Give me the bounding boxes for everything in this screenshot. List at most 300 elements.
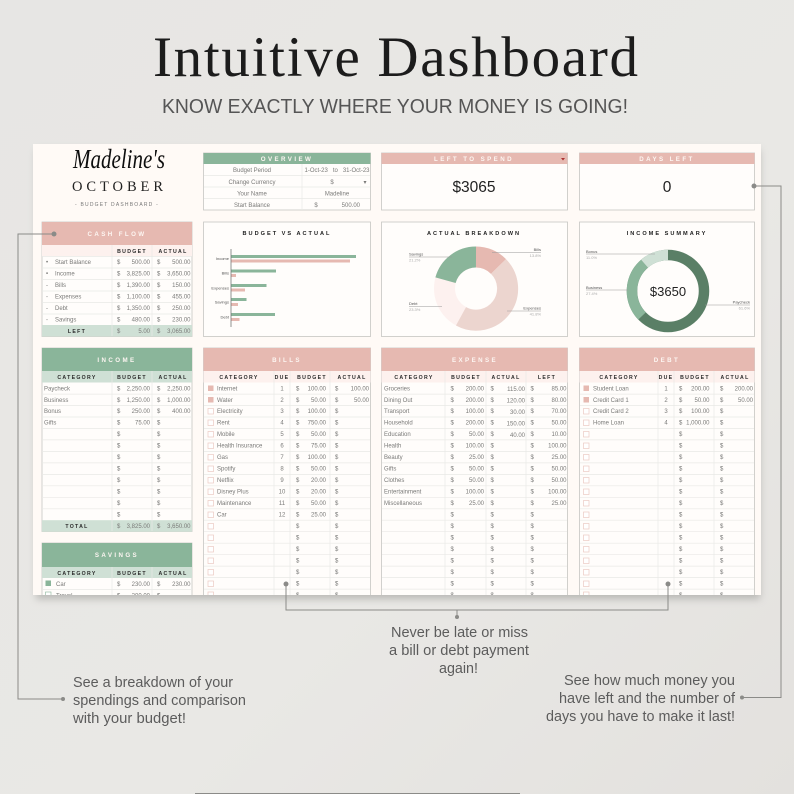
table: debt: $ bbox=[679, 409, 683, 415]
callout: breakdown: See a breakdown of your bbox=[73, 674, 233, 691]
table: debt: $ bbox=[679, 398, 683, 404]
table: expense: $ bbox=[450, 409, 454, 415]
table: expense: 50.00 bbox=[551, 478, 567, 484]
table: bills: 100.00 bbox=[308, 409, 327, 415]
table: expense: $ bbox=[530, 467, 534, 473]
table: debt: $ bbox=[679, 524, 683, 530]
table: bills: $ bbox=[335, 409, 339, 415]
table: bills: 50.00 bbox=[311, 398, 327, 404]
panel: overview: Budget Period bbox=[233, 168, 271, 174]
table: expense: $ bbox=[450, 501, 454, 507]
table: expense: Transport bbox=[384, 409, 410, 415]
table: expense: 10.00 bbox=[551, 432, 567, 438]
table: expense: 25.00 bbox=[469, 501, 485, 507]
table: income: 2,250.00 bbox=[167, 386, 191, 392]
table: income: $ bbox=[117, 444, 121, 450]
callout: payments: a bill or debt payment bbox=[389, 642, 530, 659]
table: expense: $ bbox=[450, 421, 454, 427]
table: expense: 50.00 bbox=[469, 478, 485, 484]
table: debt: Credit Card 2 bbox=[593, 409, 629, 415]
dashboard sheet bbox=[33, 144, 761, 603]
table: savings: $ bbox=[117, 582, 121, 588]
table: savings: $ bbox=[157, 582, 161, 588]
table: expense: $ bbox=[450, 455, 454, 461]
panel: overview: $ bbox=[314, 203, 318, 209]
chart: actual breakdown donut: Bills bbox=[534, 247, 541, 252]
table: bills: 20.00 bbox=[311, 478, 327, 484]
panel: cash flow: $ bbox=[157, 283, 161, 289]
table: bills: 6 bbox=[280, 444, 284, 450]
panel: cash flow: $ bbox=[117, 318, 121, 324]
table: expense: $ bbox=[450, 581, 454, 587]
table: bills: Gas bbox=[217, 455, 228, 461]
callout: days left: See how much money you bbox=[564, 672, 735, 689]
panel: cash flow: 1,100.00 bbox=[127, 294, 151, 300]
table: savings: Car bbox=[56, 582, 66, 588]
table: expense: 50.00 bbox=[469, 467, 485, 473]
table: bills: 1 bbox=[280, 386, 284, 392]
panel: cash flow: 3,065.00 bbox=[167, 329, 191, 335]
table: income: $ bbox=[157, 478, 161, 484]
table: expense: $ bbox=[490, 409, 494, 415]
table: debt: $ bbox=[720, 398, 724, 404]
table: expense: ACTUAL bbox=[491, 375, 521, 381]
table: debt: $ bbox=[720, 490, 724, 496]
table: expense: CATEGORY bbox=[394, 375, 434, 381]
panel: overview: Madeline bbox=[325, 192, 350, 198]
table: income: $ bbox=[157, 467, 161, 473]
chart: actual breakdown donut: 23.3% bbox=[409, 307, 421, 312]
panel: cash flow: $ bbox=[117, 329, 121, 335]
table: expense: $ bbox=[490, 512, 494, 518]
table: expense: Beauty bbox=[384, 455, 403, 461]
callout: payments: Never be late or miss bbox=[391, 624, 528, 641]
panel: cash flow: 250.00 bbox=[172, 306, 191, 312]
panel: cash flow: - bbox=[46, 306, 48, 312]
panel: cash flow: Savings bbox=[55, 318, 76, 324]
table: bills: Netflix bbox=[217, 478, 234, 484]
table: expense: 100.00 bbox=[466, 490, 485, 496]
table: expense: $ bbox=[490, 547, 494, 553]
panel: cash flow: 1,350.00 bbox=[127, 306, 151, 312]
table: debt: Credit Card 1 bbox=[593, 398, 629, 404]
panel: overview: OVERVIEW bbox=[261, 156, 313, 163]
panel: days left: DAYS LEFT bbox=[639, 156, 695, 163]
table: bills: 11 bbox=[279, 501, 286, 507]
table: expense: 120.00 bbox=[507, 398, 526, 404]
table: income: $ bbox=[157, 524, 161, 530]
table: income: $ bbox=[117, 501, 121, 507]
table: bills: $ bbox=[296, 386, 300, 392]
table: debt: 50.00 bbox=[738, 398, 754, 404]
table: bills: $ bbox=[296, 455, 300, 461]
table: expense: $ bbox=[490, 524, 494, 530]
table: bills: Health Insurance bbox=[217, 444, 263, 450]
table: expense: 50.00 bbox=[551, 421, 567, 427]
table: expense: 80.00 bbox=[551, 398, 567, 404]
table: savings: BUDGET bbox=[117, 571, 147, 577]
table: bills: $ bbox=[335, 501, 339, 507]
table: expense: $ bbox=[530, 386, 534, 392]
table: expense: 200.00 bbox=[466, 421, 485, 427]
table: bills: 50.00 bbox=[311, 467, 327, 473]
chart: budget vs actual: BUDGET VS ACTUAL bbox=[243, 231, 331, 237]
table: expense: Household bbox=[384, 421, 413, 427]
table: expense: $ bbox=[450, 444, 454, 450]
table: bills: $ bbox=[335, 512, 339, 518]
table: bills: 7 bbox=[280, 455, 284, 461]
table: debt: DUE bbox=[659, 375, 673, 381]
table: bills: 12 bbox=[279, 512, 286, 518]
table: bills: Maintenance bbox=[217, 501, 252, 507]
panel: overview: Change Currency bbox=[228, 180, 276, 186]
table: debt: $ bbox=[720, 570, 724, 576]
table: income: 1,000.00 bbox=[167, 398, 191, 404]
table: bills: 750.00 bbox=[308, 421, 327, 427]
table: debt: 1 bbox=[664, 386, 668, 392]
panel: cash flow: $ bbox=[117, 306, 121, 312]
table: expense: 25.00 bbox=[469, 455, 485, 461]
table: bills: $ bbox=[335, 524, 339, 530]
table: income: $ bbox=[117, 409, 121, 415]
table: debt: 100.00 bbox=[691, 409, 710, 415]
table: expense: 115.00 bbox=[507, 387, 526, 393]
table: debt: $ bbox=[679, 558, 683, 564]
table: debt: 200.00 bbox=[735, 386, 754, 392]
table: income: 3,825.00 bbox=[127, 524, 151, 530]
table: expense: $ bbox=[450, 593, 454, 599]
table: income: $ bbox=[157, 432, 161, 438]
table: expense: LEFT bbox=[538, 375, 556, 381]
table: income: Gifts bbox=[44, 421, 56, 427]
table: debt: $ bbox=[720, 386, 724, 392]
table: bills: Internet bbox=[217, 386, 238, 392]
table: bills: $ bbox=[296, 467, 300, 473]
table: bills: Mobile bbox=[217, 432, 235, 438]
table: savings: ACTUAL bbox=[158, 571, 188, 577]
panel: cash flow: 5.00 bbox=[138, 329, 151, 335]
table: expense: 100.00 bbox=[466, 444, 485, 450]
chart: actual breakdown donut: 21.2% bbox=[409, 258, 421, 262]
table: bills: DUE bbox=[275, 375, 289, 381]
chart: income summary donut: Business bbox=[586, 285, 602, 290]
table: debt: 3 bbox=[664, 409, 668, 415]
table: income: $ bbox=[117, 421, 121, 427]
table: expense: 100.00 bbox=[466, 409, 485, 415]
table: bills: Car bbox=[217, 512, 227, 518]
table: debt: ACTUAL bbox=[720, 375, 750, 381]
table: expense: $ bbox=[530, 478, 534, 484]
table: expense: $ bbox=[490, 398, 494, 404]
arrow: days left callout connector bbox=[740, 184, 781, 700]
table: bills: Rent bbox=[217, 421, 230, 427]
panel: left to spend: $3065 bbox=[452, 179, 496, 196]
table: expense: $ bbox=[490, 455, 494, 461]
table: debt: $ bbox=[720, 593, 724, 599]
chart: budget vs actual bbox=[204, 222, 370, 336]
table: savings: 230.00 bbox=[172, 582, 191, 588]
table: expense bbox=[382, 348, 568, 603]
panel: cash flow: $ bbox=[157, 272, 161, 278]
table: debt: $ bbox=[720, 512, 724, 518]
table: expense: 30.00 bbox=[510, 410, 526, 416]
table: expense: $ bbox=[490, 421, 494, 427]
table: expense: Entertainment bbox=[384, 490, 422, 496]
table: expense: 70.00 bbox=[551, 409, 567, 415]
table: expense: $ bbox=[530, 409, 534, 415]
table: bills: 4 bbox=[280, 421, 284, 427]
table: debt: $ bbox=[720, 432, 724, 438]
table: income: $ bbox=[157, 444, 161, 450]
table: bills: $ bbox=[296, 490, 300, 496]
table: bills: 50.00 bbox=[354, 398, 370, 404]
table: expense: $ bbox=[450, 570, 454, 576]
panel: cash flow: $ bbox=[117, 272, 121, 278]
callout: breakdown bbox=[72, 674, 246, 727]
table: income: 250.00 bbox=[132, 409, 151, 415]
table: expense: $ bbox=[450, 490, 454, 496]
table: expense: $ bbox=[530, 536, 534, 542]
table: expense: $ bbox=[530, 490, 534, 496]
table: bills: Disney Plus bbox=[217, 490, 249, 496]
table: debt: $ bbox=[679, 478, 683, 484]
table: debt: 4 bbox=[664, 421, 668, 427]
chart: income summary donut: INCOME SUMMARY bbox=[627, 231, 707, 237]
panel: cash flow: ACTUAL bbox=[158, 249, 188, 255]
table: income: $ bbox=[157, 421, 161, 427]
table: bills: BILLS bbox=[272, 357, 302, 364]
chart: actual breakdown donut: Expenses bbox=[523, 306, 541, 310]
table: income: Bonus bbox=[44, 409, 61, 415]
table: bills: 100.00 bbox=[308, 386, 327, 392]
table: debt: CATEGORY bbox=[599, 375, 639, 381]
table: bills: $ bbox=[296, 547, 300, 553]
table: bills: ACTUAL bbox=[337, 375, 367, 381]
table: expense: $ bbox=[530, 455, 534, 461]
panel: cash flow: Expenses bbox=[55, 294, 81, 300]
table: income: 2,250.00 bbox=[127, 386, 151, 392]
table: bills: CATEGORY bbox=[219, 375, 259, 381]
table: expense: $ bbox=[490, 558, 494, 564]
table: bills: $ bbox=[296, 581, 300, 587]
table: debt: $ bbox=[679, 593, 683, 599]
table: bills: 2 bbox=[280, 398, 284, 404]
table: debt: $ bbox=[720, 421, 724, 427]
table: income: $ bbox=[157, 501, 161, 507]
table: income: $ bbox=[117, 467, 121, 473]
table: expense: $ bbox=[450, 478, 454, 484]
table: expense: $ bbox=[530, 581, 534, 587]
table: expense: Clothes bbox=[384, 478, 404, 484]
table: expense: $ bbox=[530, 547, 534, 553]
table: income: BUDGET bbox=[117, 375, 147, 381]
table: bills: 20.00 bbox=[311, 490, 327, 496]
callout: breakdown: spendings and comparison bbox=[73, 692, 246, 709]
table: expense: $ bbox=[490, 501, 494, 507]
table: debt: Student Loan bbox=[593, 386, 629, 392]
table: savings: $ bbox=[117, 594, 121, 600]
table: expense: $ bbox=[490, 467, 494, 473]
table: income: CATEGORY bbox=[57, 375, 97, 381]
panel: cash flow: $ bbox=[117, 294, 121, 300]
panel: cash flow: $ bbox=[157, 294, 161, 300]
table: debt: $ bbox=[720, 455, 724, 461]
table: income: INCOME bbox=[97, 357, 137, 364]
table: expense: $ bbox=[490, 570, 494, 576]
panel: cash flow: - bbox=[46, 283, 48, 289]
table: expense: $ bbox=[490, 490, 494, 496]
table: debt: $ bbox=[720, 547, 724, 553]
table: expense: EXPENSE bbox=[452, 357, 498, 364]
table: expense: 50.00 bbox=[469, 432, 485, 438]
table: income bbox=[42, 348, 192, 532]
callout: days left: have left and the number of bbox=[559, 690, 736, 707]
panel: cash flow: • bbox=[46, 260, 48, 266]
table: debt: $ bbox=[720, 524, 724, 530]
table: bills: $ bbox=[296, 536, 300, 542]
table: debt: $ bbox=[679, 455, 683, 461]
chart: income summary donut: 11.0% bbox=[586, 255, 597, 260]
panel: cash flow: 500.00 bbox=[132, 260, 151, 266]
table: savings: 200.00 bbox=[132, 594, 151, 600]
table: expense: $ bbox=[530, 421, 534, 427]
table: income: Paycheck bbox=[44, 386, 71, 392]
table: income: $ bbox=[117, 398, 121, 404]
table: expense: $ bbox=[530, 524, 534, 530]
panel: cash flow: $ bbox=[157, 260, 161, 266]
table: debt: BUDGET bbox=[680, 375, 710, 381]
table: bills: $ bbox=[296, 478, 300, 484]
table: expense: $ bbox=[490, 386, 494, 392]
table: expense: 200.00 bbox=[466, 386, 485, 392]
table: income: $ bbox=[157, 490, 161, 496]
panel: cash flow: $ bbox=[117, 283, 121, 289]
table: income: $ bbox=[117, 432, 121, 438]
table: bills: Water bbox=[217, 398, 233, 404]
table: bills: 100.00 bbox=[351, 386, 370, 392]
table: income: TOTAL bbox=[65, 524, 89, 530]
chart: budget vs actual: Bills bbox=[222, 270, 229, 276]
chart: budget vs actual: Income bbox=[216, 256, 230, 261]
table: debt: $ bbox=[720, 409, 724, 415]
table: bills: 75.00 bbox=[311, 444, 327, 450]
table: expense: Gifts bbox=[384, 467, 396, 473]
panel: cash flow: 3,825.00 bbox=[127, 272, 151, 278]
table: expense: Health bbox=[384, 444, 401, 450]
table: income: ACTUAL bbox=[158, 375, 188, 381]
table: bills: $ bbox=[335, 593, 339, 599]
panel: overview: 1-Oct-23 to 31-Oct-23 bbox=[304, 168, 370, 174]
table: income: 400.00 bbox=[172, 409, 191, 415]
table: bills: 50.00 bbox=[311, 501, 327, 507]
table: expense: $ bbox=[490, 444, 494, 450]
table: expense: 40.00 bbox=[510, 433, 526, 439]
table: expense: $ bbox=[450, 547, 454, 553]
table: bills: 5 bbox=[280, 432, 284, 438]
panel: cash flow: Bills bbox=[55, 283, 66, 289]
table: debt: 200.00 bbox=[691, 386, 710, 392]
brand heading: Madeline's bbox=[72, 144, 165, 174]
table: income: $ bbox=[117, 512, 121, 518]
table: savings: 230.00 bbox=[132, 582, 151, 588]
panel: cash flow: 230.00 bbox=[172, 318, 191, 324]
panel: cash flow: CASH FLOW bbox=[87, 231, 147, 238]
table: expense: $ bbox=[490, 478, 494, 484]
table: bills: $ bbox=[335, 547, 339, 553]
table: expense: $ bbox=[530, 558, 534, 564]
callout: days left bbox=[546, 672, 736, 725]
table: expense: 85.00 bbox=[551, 386, 567, 392]
table: bills: $ bbox=[335, 467, 339, 473]
table: debt: $ bbox=[679, 467, 683, 473]
table: income: $ bbox=[157, 398, 161, 404]
table: bills: 8 bbox=[280, 467, 284, 473]
table: expense: $ bbox=[450, 432, 454, 438]
table: debt: $ bbox=[679, 444, 683, 450]
table: debt bbox=[580, 348, 754, 603]
table: income: $ bbox=[117, 478, 121, 484]
table: expense: $ bbox=[450, 512, 454, 518]
table: bills: 50.00 bbox=[311, 432, 327, 438]
table: expense: $ bbox=[530, 593, 534, 599]
arrow: bills and debt callout connector bbox=[284, 582, 670, 619]
chart: income summary donut: Paycheck bbox=[733, 300, 750, 304]
chart: budget vs actual: Expenses bbox=[211, 286, 229, 290]
table: bills: $ bbox=[296, 593, 300, 599]
table: bills: $ bbox=[296, 570, 300, 576]
table: bills: $ bbox=[296, 409, 300, 415]
table: bills: $ bbox=[296, 421, 300, 427]
table: expense: 100.00 bbox=[548, 444, 567, 450]
chart: income summary donut: 61.6% bbox=[739, 306, 750, 310]
table: bills: $ bbox=[296, 524, 300, 530]
table: bills: 25.00 bbox=[311, 512, 327, 518]
panel: overview bbox=[204, 153, 370, 210]
table: income: 75.00 bbox=[135, 421, 151, 427]
panel: cash flow: 150.00 bbox=[172, 283, 191, 289]
table: expense: $ bbox=[530, 398, 534, 404]
callout: breakdown: with your budget! bbox=[72, 710, 186, 727]
table: bills: $ bbox=[296, 512, 300, 518]
table: expense: $ bbox=[490, 536, 494, 542]
panel: days left bbox=[580, 153, 754, 210]
panel: left to spend: LEFT TO SPEND bbox=[434, 156, 514, 163]
table: debt: 2 bbox=[664, 398, 668, 404]
table: debt: $ bbox=[679, 581, 683, 587]
panel: overview: $ bbox=[330, 180, 334, 186]
table: expense: $ bbox=[490, 432, 494, 438]
brand heading: OCTOBER bbox=[72, 179, 163, 195]
table: debt: $ bbox=[679, 570, 683, 576]
panel: overview: Your Name bbox=[237, 192, 268, 198]
table: bills: $ bbox=[296, 432, 300, 438]
chart: actual breakdown donut: Debt bbox=[409, 301, 418, 306]
panel: overview: Start Balance bbox=[234, 203, 271, 209]
panel: cash flow: Start Balance bbox=[55, 260, 92, 266]
title: Intuitive Dashboard bbox=[153, 26, 638, 89]
table: expense: BUDGET bbox=[451, 375, 481, 381]
table: expense: $ bbox=[450, 536, 454, 542]
chart: budget vs actual: Savings bbox=[215, 300, 229, 304]
panel: cash flow: 455.00 bbox=[172, 294, 191, 300]
table: bills: $ bbox=[335, 432, 339, 438]
table: debt: $ bbox=[720, 536, 724, 542]
table: bills: $ bbox=[296, 558, 300, 564]
panel: cash flow: $ bbox=[157, 306, 161, 312]
table: expense: $ bbox=[450, 558, 454, 564]
table: debt: $ bbox=[720, 558, 724, 564]
table: bills: BUDGET bbox=[297, 375, 327, 381]
